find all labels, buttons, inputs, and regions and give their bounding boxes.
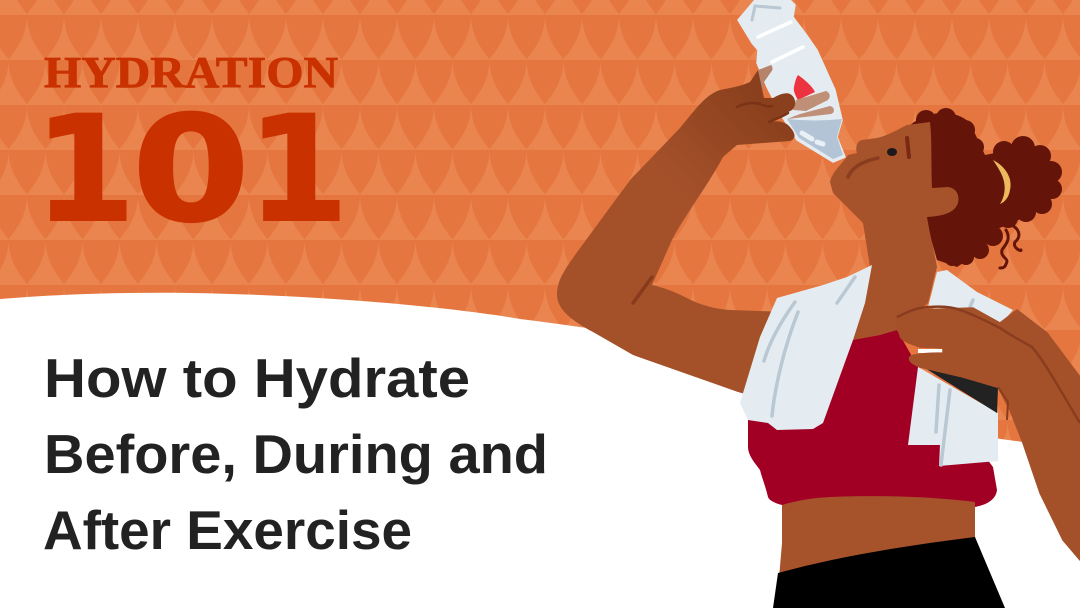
water bottle [738, 0, 845, 162]
heading: how to hydrate: After Exercise [43, 499, 412, 561]
title: 101: 0 [132, 85, 250, 255]
title: 101 [34, 85, 349, 255]
orange patterned background [0, 0, 1080, 460]
title: 101: 1 [34, 85, 136, 255]
heading: how to hydrate [43, 347, 548, 561]
title: Hydration: HYDRATION [44, 48, 338, 97]
title: 101: 1 [247, 85, 349, 255]
raised arm and hand [557, 70, 795, 396]
white towel [740, 265, 1013, 466]
white curved panel [0, 293, 1080, 608]
hair tie [993, 160, 1011, 204]
illustration: woman drinking water [557, 0, 1080, 608]
black shorts [773, 537, 1005, 608]
heading: how to hydrate: Before, During and [44, 423, 548, 485]
torso [778, 480, 975, 590]
hair [907, 108, 1062, 268]
heading: how to hydrate: How to Hydrate [44, 347, 470, 409]
front arm and hand [895, 307, 1080, 560]
head and neck [830, 122, 959, 340]
sports top [748, 330, 997, 507]
